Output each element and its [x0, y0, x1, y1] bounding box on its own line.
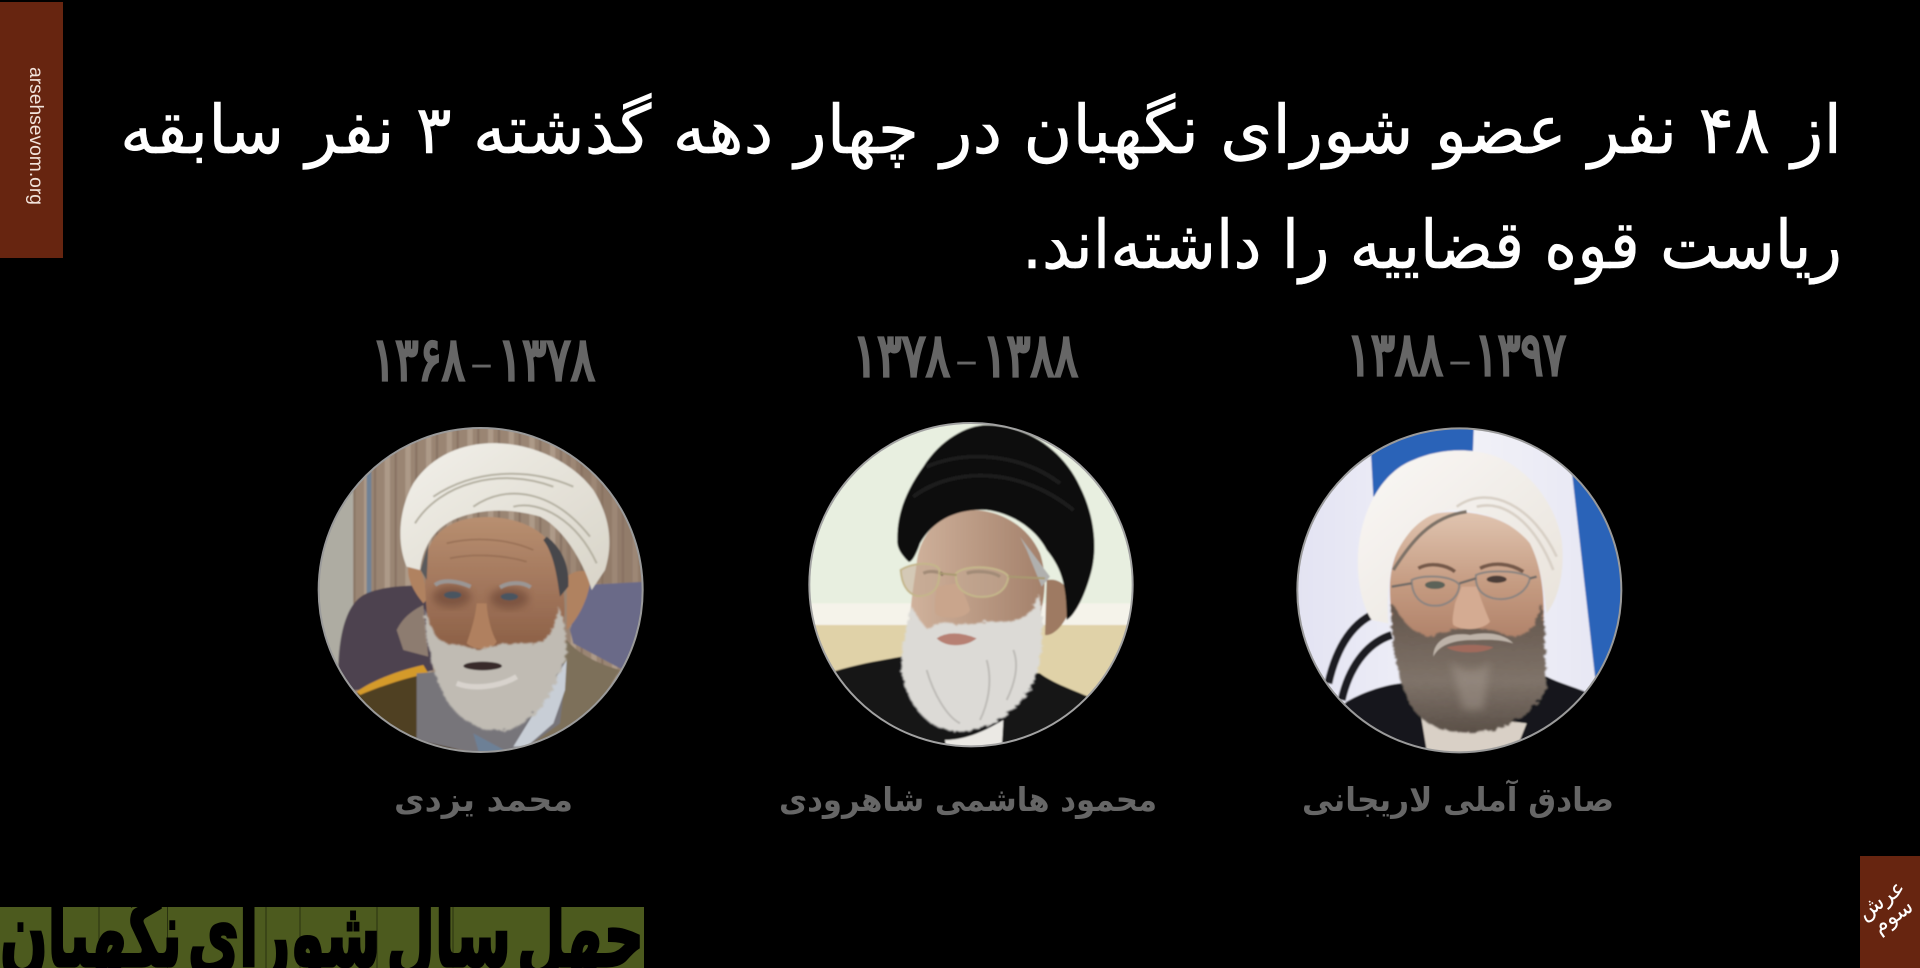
title: ریاست قوه قضاییه را داشته‌اند.: [1022, 206, 1842, 285]
logo tab: سوم: [1868, 894, 1918, 939]
name: Mahmoud Hashemi Shahroudi: محمود هاشمی شاهرودی: [779, 780, 1157, 820]
title: [120, 91, 1842, 285]
title: از ۴۸ نفر عضو شورای نگهبان در چهار دهه گذشته ۳ نفر سابقه: [120, 91, 1842, 170]
logo tab: عرش: [1853, 875, 1910, 925]
name: Mohammad Yazdi: محمد یزدی: [394, 780, 573, 820]
period: Shahroudi: ۱۳۷۸: [853, 321, 950, 391]
banner: forty years of the Guardian Council: [0, 907, 644, 968]
side tab: website: [0, 2, 63, 258]
period: Larijani: –: [1448, 338, 1472, 384]
period: Larijani: ۱۳۹۷: [1475, 320, 1566, 390]
period: Yazdi: ۱۳۷۸: [498, 325, 595, 395]
period: Larijani: ۱۳۸۸: [1347, 320, 1443, 390]
portrait: Sadegh Amoli Larijani: [1287, 423, 1633, 763]
side tab: website: arsehsevom.org: [25, 67, 46, 205]
period: Larijani: [1347, 320, 1566, 390]
period: Shahroudi: [853, 321, 1078, 391]
period: Shahroudi: ۱۳۸۸: [983, 321, 1078, 391]
name: Sadegh Amoli Larijani: صادق آملی لاریجانی: [1302, 779, 1614, 819]
portrait: Mohammad Yazdi: [318, 427, 644, 753]
period: Yazdi: ۱۳۶۸: [372, 325, 465, 395]
period: Yazdi: [372, 325, 595, 395]
logo tab: [1853, 856, 1920, 968]
period: Yazdi: –: [470, 341, 493, 387]
period: Shahroudi: –: [955, 338, 978, 384]
portrait: Mahmoud Hashemi Shahroudi: [800, 417, 1143, 753]
